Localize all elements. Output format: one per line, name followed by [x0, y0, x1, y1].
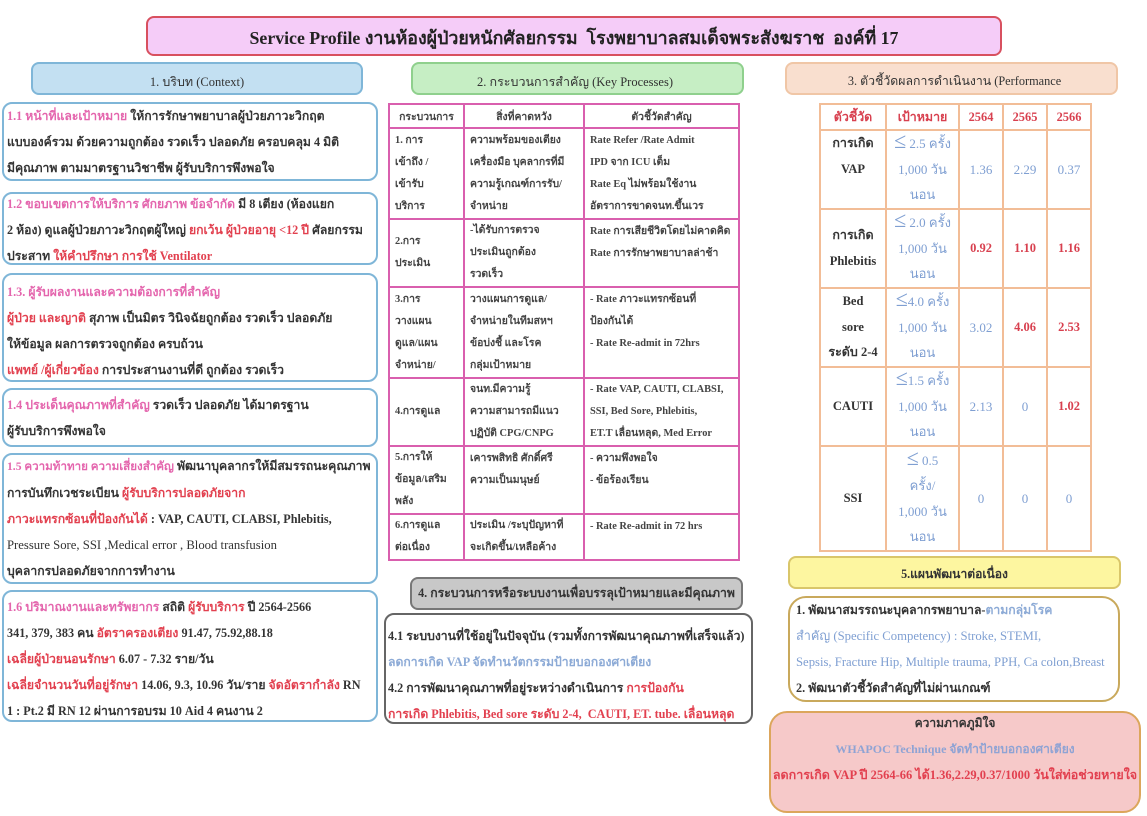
panel: improvement plan [788, 596, 1120, 702]
table: key processes: เข้าถึง / [395, 157, 428, 168]
table: key processes: - ข้อร้องเรียน [590, 475, 649, 486]
table: key processes: ความเป็นมนุษย์ [470, 475, 540, 486]
panel: 1.5 challenges and risks: บุคลากรปลอดภัยจากการทำงาน [7, 564, 175, 578]
table: key processes: ตัวชี้วัดสำคัญ [631, 112, 692, 123]
table: key processes: - Rate VAP, CAUTI, CLABSI, [590, 384, 723, 395]
table: key processes: เครื่องมือ บุคลากรที่มี [470, 157, 564, 168]
panel: 1.1 duty and goals: มีคุณภาพ ตามมาตรฐานวิชาชีพ ผู้รับบริการพึงพอใจ [7, 160, 275, 174]
panel: 1.2 scope: 2 ห้อง) ดูแลผู้ป่วยภาวะวิกฤตผู้ใหญ่ ยกเว้น ผู้ป่วยอายุ <12 ปี ศัลยกรรม [7, 223, 363, 237]
table: performance indicators: 1,000 วัน [898, 241, 947, 256]
table: key processes: - ความพึงพอใจ [590, 453, 658, 464]
table: performance indicators: 2.13 [970, 399, 992, 414]
table: performance indicators: นอน [910, 266, 935, 281]
panel: 1.6 workload and resources: 1 : Pt.2 มี RN 12 ผ่านการอบรม 10 Aid 4 คนงาน 2 [7, 704, 263, 718]
table: key processes: อัตราการขาดจนท.ขึ้นเวร [590, 201, 704, 212]
table: performance indicators: 1,000 วัน [898, 162, 947, 177]
panel: process systems: ลดการเกิด VAP จัดทำนวัตกรรมป้ายบอกองศาเตียง [388, 655, 651, 669]
heading: key processes [411, 62, 744, 95]
panel: 1.5 challenges and risks [2, 453, 378, 584]
table: performance indicators: นอน [910, 529, 935, 544]
panel: process systems: การเกิด Phlebitis, Bed sore ระดับ 2-4, CAUTI, ET. tube. เลื่อนหลุด [388, 707, 734, 721]
panel: 1.3 customers and needs: ให้ข้อมูล ผลการตรวจถูกต้อง ครบถ้วน [7, 337, 203, 351]
table: key processes: ข้อบ่งชี้ และโรค [470, 338, 541, 349]
table: key processes: - Rate Re-admit in 72 hrs [590, 521, 702, 532]
table: key processes: รวดเร็ว [470, 269, 503, 280]
table: key processes [388, 103, 740, 561]
panel: pride: WHAPOC Technique จัดทำป้ายบอกองศาเตียง [835, 742, 1075, 756]
table: performance indicators: 1,000 วัน [898, 504, 947, 518]
title: Service Profile งานห้องผู้ป่วยหนักศัลยกรรม โรงพยาบาลสมเด็จพระสังฆราช องค์ที่ 17 [250, 28, 898, 48]
panel: 1.3 customers and needs: 1.3. ผู้รับผลงานและความต้องการที่สำคัญ [7, 285, 220, 299]
heading: process systems: 4. กระบวนการหรือระบบงานเพื่อบรรลุเป้าหมายและมีคุณภาพ [418, 586, 735, 600]
heading: continuous improvement plan: 5.แผนพัฒนาต่อเนื่อง [901, 566, 1008, 580]
table: performance indicators: 0.37 [1058, 162, 1080, 177]
panel: improvement plan: 2. พัฒนาตัวชี้วัดสำคัญที่ไม่ผ่านเกณฑ์ [796, 681, 990, 695]
panel: 1.3 customers and needs: ผู้ป่วย และญาติ สุภาพ เป็นมิตร วินิจฉัยถูกต้อง รวดเร็ว ปลอดภัย [7, 311, 332, 325]
table: key processes: -ได้รับการตรวจ [470, 225, 540, 236]
table: key processes: เคารพสิทธิ ศักดิ์ศรี [470, 453, 553, 464]
table: performance indicators: การเกิด [832, 228, 874, 242]
table: key processes: ต่อเนื่อง [395, 542, 430, 553]
table: key processes: กลุ่มเป้าหมาย [470, 360, 531, 371]
table: performance indicators: 1,000 วัน [898, 320, 947, 335]
table: performance indicators: ครั้ง/ [910, 478, 935, 493]
panel: pride: ลดการเกิด VAP ปี 2564-66 ได้1.36,2.29,0.37/1000 วันใส่ท่อช่วยหายใจ [773, 768, 1137, 782]
table: key processes: ดูแล/แผน [395, 338, 438, 349]
table: key processes: จำหน่าย/ [395, 360, 436, 371]
table: performance indicators: 2564 [969, 110, 993, 124]
table: performance indicators: 0 [1022, 399, 1028, 414]
heading: context: 1. บริบท (Context) [150, 74, 244, 88]
panel: 1.6 workload and resources: 1.6 ปริมาณงานและทรัพยากร สถิติ ผู้รับบริการ ปี 2564-2566 [7, 600, 311, 614]
table: key processes: จะเกิดขึ้น/เหลือค้าง [470, 542, 556, 553]
panel: 1.1 duty and goals: แบบองค์รวม ด้วยความถูกต้อง รวดเร็ว ปลอดภัย ครอบคลุม 4 มิติ [7, 134, 339, 148]
heading: performance [785, 62, 1118, 95]
table: key processes: - Rate Re-admit in 72hrs [590, 338, 700, 349]
table: key processes: Rate การเสียชีวิตโดยไม่คาดคิด [590, 226, 730, 237]
panel: 1.2 scope: 1.2 ขอบเขตการให้บริการ ศักยภาพ ข้อจำกัด มี 8 เตียง (ห้องแยก [7, 197, 334, 211]
table: key processes: 3.การ [395, 294, 420, 305]
panel: 1.4 quality issues [2, 388, 378, 447]
table: performance indicators: 1.36 [970, 162, 992, 177]
table: key processes: ประเมิน [395, 258, 430, 269]
panel: 1.6 workload and resources: เฉลี่ยผู้ป่วยนอนรักษา 6.07 - 7.32 ราย/วัน [7, 652, 214, 666]
table: key processes: ความรู้เกณฑ์การรับ/ [470, 179, 562, 190]
panel: process systems [384, 613, 753, 724]
panel: process systems: 4.1 ระบบงานที่ใช้อยู่ในปัจจุบัน (รวมทั้งการพัฒนาคุณภาพที่เสร็จแล้ว) [388, 629, 744, 643]
table: key processes: ความสามารถมีแนว [470, 406, 559, 417]
table: performance indicators: นอน [910, 345, 935, 360]
table: performance indicators: 2.53 [1058, 320, 1080, 334]
table: performance indicators: การเกิด [832, 136, 874, 150]
panel: 1.5 challenges and risks: การบันทึกเวชระเบียน ผู้รับบริการปลอดภัยจาก [7, 486, 246, 500]
panel: improvement plan: สำคัญ (Specific Competency) : Stroke, STEMI, [796, 629, 1041, 643]
table: performance indicators: SSI [844, 491, 862, 505]
table: performance indicators: 2.29 [1014, 162, 1036, 177]
panel: pride [769, 711, 1141, 813]
heading: continuous improvement plan [788, 556, 1121, 589]
table: performance indicators: 1,000 วัน [898, 399, 947, 414]
panel: pride: ความภาคภูมิใจ [915, 716, 995, 730]
table: key processes: ปฏิบัติ CPG/CNPG [470, 428, 554, 439]
title [146, 16, 1002, 56]
panel: improvement plan: 1. พัฒนาสมรรถนะบุคลากรพยาบาล-ตามกลุ่มโรค [796, 603, 1052, 617]
panel: 1.6 workload and resources [2, 590, 378, 722]
table: key processes: Rate Refer /Rate Admit [590, 135, 695, 146]
table: key processes: Rate การรักษาพยาบาลล่าช้า [590, 248, 718, 259]
table: key processes: ป้องกันได้ [590, 316, 633, 327]
table: performance indicators: Phlebitis [830, 254, 876, 268]
panel: process systems: 4.2 การพัฒนาคุณภาพที่อยู่ระหว่างดำเนินการ การป้องกัน [388, 681, 684, 695]
panel: 1.2 scope: ประสาท ให้คำปรึกษา การใช้ Ventilator [7, 249, 212, 263]
heading: performance: 3. ตัวชี้วัดผลการดำเนินงาน (Performance [848, 74, 1061, 88]
table: performance indicators: 0 [978, 491, 984, 506]
table: performance indicators: 1.16 [1058, 241, 1080, 255]
table: key processes: 1. การ [395, 135, 423, 146]
table: key processes: วางแผน [395, 316, 432, 327]
table: performance indicators: Bed [843, 294, 863, 308]
table: key processes: 6.การดูแล [395, 520, 440, 531]
panel: 1.1 duty and goals [2, 102, 378, 181]
heading: key processes: 2. กระบวนการสำคัญ (Key Processes) [477, 74, 673, 88]
table: key processes: จนท.มีความรู้ [470, 384, 531, 395]
table: performance indicators: 1.10 [1014, 241, 1036, 255]
table: key processes: บริการ [395, 201, 425, 212]
panel: 1.4 quality issues: 1.4 ประเด็นคุณภาพที่สำคัญ รวดเร็ว ปลอดภัย ได้มาตรฐาน [7, 398, 309, 412]
table: key processes: จำหน่าย [470, 201, 508, 212]
heading: context [31, 62, 363, 95]
table: performance indicators [819, 103, 1092, 552]
table: key processes: เข้ารับ [395, 179, 424, 190]
heading: process systems [410, 577, 743, 610]
table: performance indicators: 2566 [1057, 110, 1081, 124]
table: key processes: สิ่งที่คาดหวัง [496, 112, 552, 123]
table: performance indicators: sore [842, 320, 864, 334]
table: performance indicators: นอน [910, 424, 935, 439]
table: key processes: ประเมินถูกต้อง [470, 247, 536, 258]
table: performance indicators: VAP [841, 162, 865, 176]
panel: 1.5 challenges and risks: Pressure Sore, SSI ,Medical error , Blood transfusion [7, 538, 277, 552]
table: performance indicators: นอน [910, 187, 935, 202]
table: key processes: IPD จาก ICU เต็ม [590, 157, 670, 168]
table: performance indicators: CAUTI [833, 399, 873, 413]
panel: 1.6 workload and resources: เฉลี่ยจำนวนวันที่อยู่รักษา 14.06, 9.3, 10.96 วัน/ราย จัดอัตรากำลัง RN [7, 678, 361, 692]
table: key processes: วางแผนการดูแล/ [470, 294, 547, 305]
table: key processes: 2.การ [395, 236, 420, 247]
panel: 1.4 quality issues: ผู้รับบริการพึงพอใจ [7, 424, 106, 438]
table: key processes: - Rate ภาวะแทรกซ้อนที่ [590, 294, 696, 305]
table: performance indicators: 3.02 [970, 320, 992, 335]
table: key processes: Rate Eq ไม่พร้อมใช้งาน [590, 179, 696, 190]
table: key processes: ความพร้อมของเตียง [470, 135, 561, 146]
table: key processes: กระบวนการ [399, 112, 454, 123]
panel: 1.6 workload and resources: 341, 379, 383 คน อัตราครองเตียง 91.47, 75.92,88.18 [7, 626, 273, 640]
table: performance indicators: 0 [1066, 491, 1072, 506]
table: performance indicators: ระดับ 2-4 [828, 345, 878, 359]
panel: improvement plan: Sepsis, Fracture Hip, Multiple trauma, PPH, Ca colon,Breast [796, 655, 1105, 669]
table: key processes: SSI, Bed Sore, Phlebitis, [590, 406, 697, 417]
panel: 1.2 scope [2, 192, 378, 265]
table: key processes: ข้อมูล/เสริม [395, 474, 447, 485]
table: key processes: 4.การดูแล [395, 406, 440, 417]
table: key processes: พลัง [395, 496, 413, 507]
table: key processes: ET.T เลื่อนหลุด, Med Error [590, 428, 712, 439]
panel: 1.5 challenges and risks: 1.5 ความท้าทาย ความเสี่ยงสำคัญ พัฒนาบุคลากรให้มีสมรรถนะคุณภาพ [7, 459, 371, 473]
table: performance indicators: 1.02 [1058, 399, 1080, 413]
table: key processes: จำหน่ายในทีมสหฯ [470, 316, 553, 327]
table: key processes: ประเมิน /ระบุปัญหาที่ [470, 520, 564, 531]
panel: 1.3 customers and needs [2, 273, 378, 382]
panel: 1.3 customers and needs: แพทย์ /ผู้เกี่ยวข้อง การประสานงานที่ดี ถูกต้อง รวดเร็ว [7, 363, 284, 377]
table: key processes: 5.การให้ [395, 452, 432, 463]
table: performance indicators: ตัวชี้วัด [834, 110, 872, 124]
table: performance indicators: 2565 [1013, 110, 1037, 124]
panel: 1.1 duty and goals: 1.1 หน้าที่และเป้าหมาย ให้การรักษาพยาบาลผู้ป่วยภาวะวิกฤต [7, 108, 325, 122]
table: performance indicators: 0 [1022, 491, 1028, 506]
table: performance indicators: 0.92 [970, 241, 992, 255]
panel: 1.5 challenges and risks: ภาวะแทรกซ้อนที่ป้องกันได้ : VAP, CAUTI, CLABSI, Phlebitis, [7, 512, 332, 526]
table: performance indicators: เป้าหมาย [898, 110, 947, 124]
table: performance indicators: 4.06 [1014, 320, 1036, 334]
